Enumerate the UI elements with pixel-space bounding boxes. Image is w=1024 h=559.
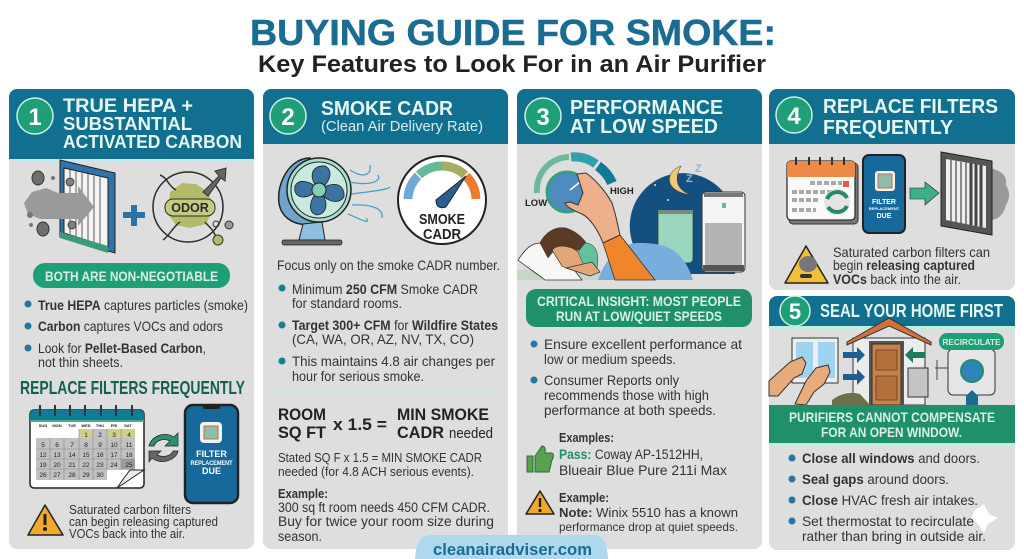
warning text: Saturated carbon filters can	[833, 244, 990, 260]
panel 4 header: REPLACE FILTERS	[823, 96, 998, 118]
text block: example: Buy for twice your room size during	[278, 514, 494, 529]
text block: CADR bullets: Minimum 250 CFM Smoke CADR	[292, 281, 478, 297]
icon: recirculate thermostat: RECIRCULATE	[942, 337, 1001, 347]
text block: CADR bullets: Target 300+ CFM for Wildfire States	[292, 317, 498, 333]
text block: CADR bullets: hour for serious smoke.	[292, 368, 424, 384]
icon: phone: REPLACEMENT	[869, 206, 900, 211]
bullet list	[530, 336, 742, 418]
callout: both are non-negotiable	[33, 263, 230, 288]
icon: calendar: 29	[82, 472, 90, 479]
text block: example: needed (for 4.8 ACH serious events).	[278, 465, 474, 479]
icon: calendar: 17	[110, 452, 118, 459]
text block: note example: performance drop at quiet speeds.	[559, 520, 738, 534]
text block: CADR bullets: (CA, WA, OR, AZ, NV, TX, CO)	[292, 331, 474, 347]
icon: calendar with refresh	[787, 157, 858, 224]
icon: calendar: FRI	[111, 423, 117, 428]
icon: thumbs up	[527, 446, 554, 472]
bullet list: Look for Pellet-Based Carbon,	[38, 340, 206, 356]
illustration: night circle with purifiers: Z	[695, 163, 702, 175]
icon: calendar	[30, 405, 144, 488]
icon: calendar: 6	[55, 442, 59, 449]
bullet list: performance at both speeds.	[544, 402, 716, 418]
text block: example: 300 sq ft room needs 450 CFM CADR.	[278, 500, 490, 515]
icon: odor circle: ODOR	[171, 201, 209, 215]
text block: pass example: Pass: Coway AP-1512HH,	[559, 447, 703, 462]
bullet list: Close HVAC fresh air intakes.	[802, 492, 978, 508]
panel 1 header: TRUE HEPA +	[63, 96, 193, 117]
icon: calendar: 30	[96, 472, 104, 479]
icon: calendar: 13	[53, 452, 61, 459]
icon: calendar: 5	[41, 442, 45, 449]
warning text	[69, 503, 218, 541]
icon: plus	[123, 205, 145, 226]
callout: purifiers cannot compensate	[769, 405, 1015, 446]
icon: calendar: 20	[53, 462, 61, 469]
icon: phone: DUE	[877, 213, 892, 220]
panel: 2 smoke CADR	[263, 89, 508, 549]
panel 2 header: (Clean Air Delivery Rate)	[321, 118, 483, 135]
callout: critical insight: RUN AT LOW/QUIET SPEEDS	[556, 308, 722, 324]
callout: purifiers cannot compensate: PURIFIERS CANNOT COMPENSATE	[789, 409, 995, 425]
text block: CADR bullets	[277, 257, 500, 384]
icon: fan	[279, 158, 390, 245]
icon: calendar: 16	[96, 452, 104, 459]
text block: CADR bullets: This maintains 4.8 air changes per	[292, 353, 495, 369]
panel: 4 replace filters frequently	[769, 89, 1015, 290]
panel 4 header: 4	[787, 103, 801, 130]
bullet list: recommends those with high	[544, 387, 709, 403]
sparkle patch	[971, 504, 998, 533]
warning text	[833, 244, 990, 287]
icon: calendar: 24	[110, 462, 118, 469]
icon: calendar: 7	[70, 442, 74, 449]
icon: calendar: THU	[96, 423, 104, 428]
panel 2 header: 2	[281, 104, 295, 131]
text block: CADR bullets: Focus only on the smoke CADR number.	[277, 257, 500, 273]
icon: phone: FILTER	[872, 199, 896, 206]
callout: purifiers cannot compensate: FOR AN OPEN WINDOW.	[821, 424, 962, 440]
icon: smoke CADR gauge: SMOKE	[419, 211, 465, 228]
formula	[277, 391, 495, 442]
text block: CADR bullets: for standard rooms.	[292, 295, 402, 311]
text block: example: Example:	[278, 487, 328, 501]
icon: calendar: 3	[112, 432, 116, 439]
icon: smoke CADR gauge	[398, 156, 486, 244]
bullet list: Consumer Reports only	[544, 372, 679, 388]
text block: note example: Note: Winix 5510 has a known	[559, 505, 738, 520]
illustration: speed dial	[525, 157, 634, 212]
bullet list: Carbon captures VOCs and odors	[38, 318, 223, 334]
panel 3 header: 3	[536, 104, 550, 131]
icon: refresh arrows	[149, 433, 178, 462]
formula: needed	[449, 425, 493, 442]
formula: ROOM	[278, 405, 326, 424]
icon: calendar: 12	[39, 452, 47, 459]
formula: x 1.5 =	[333, 415, 387, 434]
icon: calendar: 28	[68, 472, 76, 479]
icon: calendar: SUN	[39, 423, 47, 428]
panel 5 header	[769, 296, 1015, 326]
icon: calendar: 18	[125, 452, 133, 459]
icon: saturated filter	[941, 152, 1009, 235]
text block: note example: Example:	[559, 491, 609, 505]
text block: example	[278, 451, 494, 544]
icon: phone with filter replacement due: FILTER	[196, 449, 227, 459]
illustration: speed dial: LOW	[525, 198, 547, 209]
panel 1 header: ACTIVATED CARBON	[63, 131, 242, 152]
title: BUYING GUIDE FOR SMOKE:	[250, 12, 776, 53]
panel 1 header: 1	[28, 104, 42, 131]
icon: calendar: TUE	[68, 423, 76, 428]
icon: warning triangle	[28, 505, 63, 535]
callout: critical insight	[526, 289, 752, 327]
icon: warning with smoke	[785, 246, 828, 283]
heading: replace filters frequently: REPLACE FILTERS FREQUENTLY	[20, 378, 245, 398]
icon: calendar: 1	[84, 432, 88, 439]
bullet list: Ensure excellent performance at	[544, 336, 742, 352]
bullet list: True HEPA captures particles (smoke)	[38, 297, 248, 313]
bullet list	[24, 297, 248, 370]
warning text: Saturated carbon filters	[69, 503, 191, 517]
bullet list	[788, 450, 986, 544]
illustration: house with door and window	[769, 318, 1015, 405]
panel 5 header: 5	[789, 299, 801, 324]
bullet list: Seal gaps around doors.	[802, 471, 949, 487]
panel: 5 seal your home first	[769, 296, 1015, 550]
icon: calendar: 8	[84, 442, 88, 449]
icon: calendar: MON	[52, 423, 62, 428]
bullet list: low or medium speeds.	[544, 351, 676, 367]
callout: critical insight: CRITICAL INSIGHT: MOST PEOPLE	[537, 293, 741, 309]
bullet list: rather than bring in outside air.	[802, 528, 986, 544]
icon: phone with filter replacement due: REPLACEMENT	[190, 461, 233, 467]
formula: MIN SMOKE	[397, 405, 489, 424]
text block: note example	[559, 491, 738, 534]
icon: calendar: SAT	[124, 423, 132, 428]
panel 3 header: AT LOW SPEED	[570, 116, 718, 138]
illustration: sleeping woman and hand	[517, 173, 693, 280]
panel: 1 true HEPA and carbon	[9, 89, 254, 549]
text block: pass example	[559, 431, 727, 478]
icon: warning triangle	[526, 491, 554, 514]
formula: SQ FT	[278, 423, 327, 442]
warning text: begin releasing captured	[833, 257, 975, 273]
panel 3 header	[517, 89, 762, 144]
icon: calendar: 9	[98, 442, 102, 449]
text block: pass example: Blueair Blue Pure 211i Max	[559, 463, 727, 478]
panel 2 header: SMOKE CADR	[321, 98, 454, 120]
icon: calendar: 21	[68, 462, 76, 469]
text block: pass example: Examples:	[559, 431, 614, 445]
footer: website	[415, 535, 608, 559]
illustration: night circle with purifiers	[630, 163, 745, 274]
icon: calendar: 19	[39, 462, 47, 469]
icon: phone with filter replacement due: DUE	[202, 466, 221, 476]
icon: calendar: 25	[125, 462, 133, 469]
icon: calendar: 11	[126, 442, 133, 449]
warning text: can begin releasing captured	[69, 515, 218, 529]
panel 1 header	[9, 89, 254, 161]
icon: calendar: 23	[96, 462, 104, 469]
illustration: speed dial: HIGH	[610, 186, 634, 197]
arrow	[910, 182, 939, 205]
icon: calendar: 14	[68, 452, 76, 459]
icon: phone	[863, 155, 905, 233]
bullet list: not thin sheets.	[38, 354, 123, 370]
text block: example: season.	[278, 529, 322, 544]
callout: both are non-negotiable: BOTH ARE NON-NEGOTIABLE	[45, 268, 218, 284]
icon: calendar: 4	[127, 432, 131, 439]
icon: calendar: WED	[81, 423, 91, 428]
panel 2 header	[263, 89, 508, 144]
title	[250, 12, 776, 78]
icon: smoke CADR gauge: CADR	[423, 226, 461, 243]
warning text: VOCs back into the air.	[69, 527, 185, 541]
icon: calendar: 15	[82, 452, 90, 459]
text block: example: Stated SQ F x 1.5 = MIN SMOKE CADR	[278, 451, 482, 465]
panel: 3 performance at low speed	[517, 89, 762, 549]
icon: calendar: 26	[39, 472, 47, 479]
icon: calendar: 27	[53, 472, 61, 479]
panel 1 header: SUBSTANTIAL	[63, 113, 192, 134]
icon: phone with filter replacement due	[185, 405, 238, 503]
footer: website: cleanairadviser.com	[433, 540, 592, 559]
warning text: VOCs back into the air.	[833, 271, 961, 287]
title: Key Features to Look For in an Air Purifier	[258, 51, 766, 78]
icon: HEPA filter with smoke arrow	[24, 160, 115, 253]
bullet list: Set thermostat to recirculate	[802, 513, 974, 529]
icon: calendar: 22	[82, 462, 90, 469]
panel 4 header: FREQUENTLY	[823, 117, 954, 139]
icon: calendar: 10	[110, 442, 118, 449]
formula: CADR	[397, 423, 444, 442]
bullet list: Close all windows and doors.	[802, 450, 980, 466]
panel 3 header: PERFORMANCE	[570, 97, 723, 119]
icon: calendar: 2	[98, 432, 102, 439]
illustration: night circle with purifiers: Z	[686, 173, 693, 185]
icon: odor circle	[153, 168, 233, 245]
icon: recirculate thermostat	[939, 333, 1004, 405]
panel 4 header	[769, 89, 1015, 144]
